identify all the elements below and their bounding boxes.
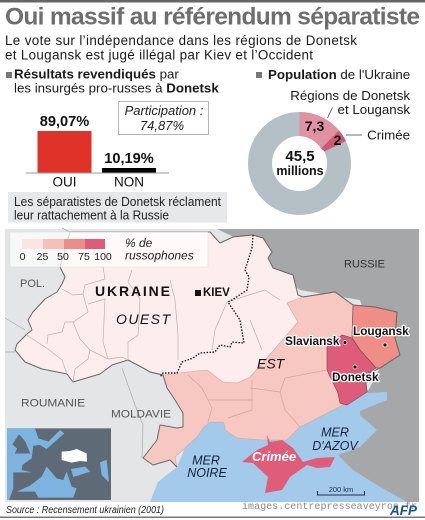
city: Lougansk [353,324,409,347]
Russia [217,229,419,502]
legend: 75 [78,251,90,263]
donut chart [260,112,346,203]
country labels [20,258,385,420]
population heading: Population de l'Ukraine [268,67,410,82]
donut labels [290,88,410,142]
subtitle: Le vote sur l’indépendance dans les régions de Donetsk [5,33,357,48]
donut chart: millions [276,164,324,178]
source: Source : Recensement ukrainien (2001) [6,505,164,516]
dotted line: east-west divide [160,235,253,377]
donut labels: Régions de Donetsk [290,88,410,103]
participation box: Participation : [125,103,204,118]
eastern and southern regions: 25-50% [143,292,353,467]
Ukraine pale regions [15,232,353,400]
zone labels [116,311,286,372]
donut chart: 2 [334,132,342,148]
country labels: ROUMANIE [21,398,85,410]
participation box [118,102,208,134]
donut chart: 7,3 [305,118,324,134]
region: Crimea [242,435,335,493]
subtitle: et Lougansk est jugé illégal par Kiev et l’Occident [5,48,313,62]
scale bar: 200 km [329,485,353,494]
sea labels: MER [321,426,349,440]
label: KIEV: KIEV [203,287,230,299]
sea labels: MER [192,454,220,468]
neighbour borders [5,228,143,458]
label: Crimée: Crimée [252,449,296,464]
state borders [143,292,400,467]
region: Lougansk [352,305,400,368]
neighbouring land [5,229,419,502]
zone labels: OUEST [116,311,171,327]
legend: 100 [94,251,112,263]
bar: NON [102,151,156,190]
donut chart: 45,5 [285,148,315,165]
results heading: les insurgés pro-russes à Donetsk [14,80,219,96]
callout: separatists: leur rattachement à la Russie [14,208,169,222]
bar: OUI: OUI [52,174,77,190]
bar: OUI: 89,07% [40,114,89,130]
bar: NON: 10,19% [104,151,154,167]
watermark: images.centrepresseaveyron.fr [242,501,417,513]
city: Lougansk: Lougansk [353,324,409,338]
legend: russophones [125,248,194,262]
country labels: RUSSIE [344,258,385,270]
panel: map [5,228,419,502]
legend [10,232,208,267]
country labels: POL. [20,278,45,290]
label: UKRAINE: UKRAINE [95,283,170,299]
AFP logo: AFP [389,503,418,518]
legend: 0 [20,251,26,263]
callout: separatists [8,192,227,222]
scale bar [318,485,364,495]
participation box: 74,87% [140,118,184,133]
bar: OUI [38,114,92,190]
legend: % de [125,236,153,250]
zone labels: EST [257,356,286,372]
callout: separatists: Les séparatistes de Donetsk réclament [14,195,221,209]
title: Oui massif au référendum séparatiste [5,4,420,30]
panel: population donut [256,67,410,203]
city: Donetsk: Donetsk [332,370,379,384]
legend: 25 [37,251,48,263]
bar: NON: NON [114,174,144,190]
legend: 50 [57,251,69,263]
donut labels: et Lougansk [338,102,410,117]
sea labels: NOIRE [187,466,227,480]
results heading: Résultats revendiqués par [14,66,179,82]
sea labels [187,426,359,480]
city: Slaviansk: Slaviansk [285,334,340,348]
panel: results bar chart [6,66,219,190]
subtitle [5,33,357,62]
sea [150,385,419,502]
sea labels: D'AZOV [312,439,359,453]
region: Donetsk [327,335,376,405]
results heading [6,66,219,96]
donut labels: Crimée [367,128,410,142]
inset locator map [7,428,111,500]
internal borders [25,267,327,427]
country labels: MOLDAVIE [111,408,171,420]
